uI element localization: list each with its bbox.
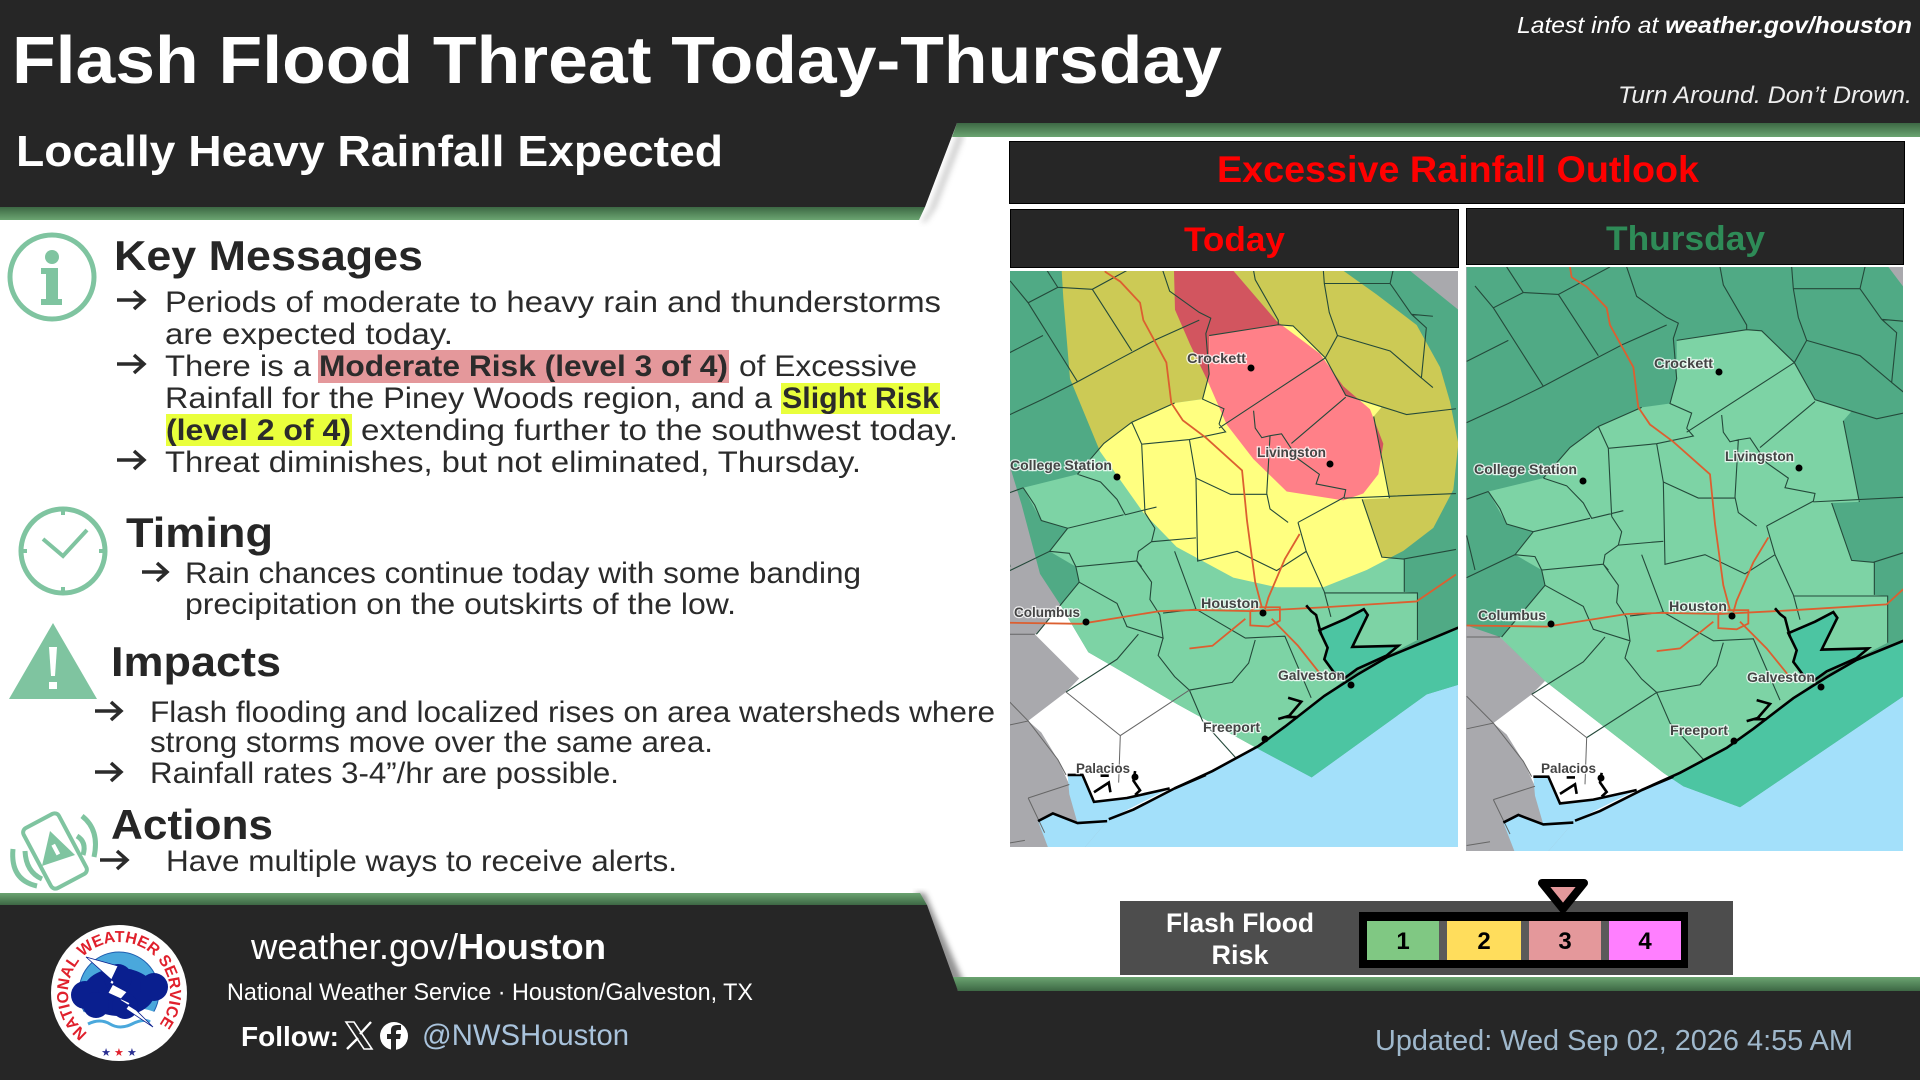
header and side panel shadows	[915, 130, 965, 985]
icon: info	[10, 235, 94, 319]
risk area over gulf	[1257, 629, 1458, 778]
city markers and labels: College Station	[1474, 462, 1577, 477]
today banner	[1010, 210, 1458, 268]
icon: warning triangle	[9, 623, 97, 699]
logo: national weather service: ★ ★ ★	[101, 1047, 137, 1059]
updated timestamp: Updated: Wed Sep 02, 2026 4:55 AM	[1375, 1025, 1853, 1057]
text: alerts: Have multiple ways to receive alerts.	[166, 845, 677, 878]
icon: x	[346, 1022, 372, 1049]
footer website: weather.gov/Houston	[250, 926, 606, 967]
text: risk levels: Slight Risk	[782, 382, 939, 415]
text: risk levels: Moderate Risk (level 3 of 4)	[319, 350, 728, 383]
text: risk levels	[165, 350, 958, 447]
text: periods of rain: Periods of moderate to heavy rain and thunderstorms	[165, 286, 941, 319]
map base: land and water	[1028, 606, 1458, 847]
social handle: @NWSHouston	[422, 1019, 629, 1052]
panel: key messages	[10, 232, 958, 479]
header green band	[952, 123, 1920, 137]
legend scale: 2	[1477, 928, 1491, 955]
footer office name: National Weather Service · Houston/Galveston, TX	[227, 979, 753, 1006]
latest info link: Latest info at weather.gov/houston	[1517, 12, 1912, 38]
map base: land and water	[1467, 267, 1920, 857]
text: risk levels: extending further to the southwest today.	[361, 414, 958, 447]
heading: key messages: Key Messages	[114, 232, 423, 279]
legend: flash flood risk	[1120, 883, 1733, 975]
panel: impacts	[9, 623, 995, 790]
legend scale: 3	[1558, 928, 1572, 955]
side panel green band	[0, 207, 925, 220]
risk areas outside forecast office	[1010, 271, 1458, 777]
arrow	[95, 702, 121, 720]
heading: actions: Actions	[111, 801, 273, 848]
arrow	[142, 563, 167, 581]
arrow	[117, 355, 144, 373]
city markers and labels: Crockett	[1654, 356, 1714, 371]
city markers and labels: Livingston	[1725, 449, 1794, 464]
legend: flash flood risk: Risk	[1211, 940, 1269, 970]
city markers and labels: Livingston	[1257, 445, 1326, 460]
city markers and labels: Houston	[1669, 599, 1727, 614]
text: threat diminishes: Threat diminishes, but not eliminated, Thursday.	[165, 446, 861, 479]
text: periods of rain	[165, 286, 941, 351]
legend scale	[1359, 912, 1688, 968]
icon: clock	[21, 509, 105, 593]
county lines, roads and coast	[1467, 267, 1920, 846]
footer dark panel	[0, 905, 1920, 1080]
legend scale: 1	[1396, 928, 1410, 955]
footer green band right	[952, 977, 1920, 991]
city markers and labels: Palacios	[1541, 761, 1596, 776]
text: flash flooding	[150, 696, 995, 759]
city markers and labels: Crockett	[1187, 351, 1247, 366]
arrow	[117, 291, 144, 309]
arrow	[95, 763, 121, 781]
subtitle: Locally Heavy Rainfall Expected	[16, 127, 723, 176]
city markers and labels: Houston	[1201, 596, 1259, 611]
map: thursday	[1466, 267, 1920, 857]
city markers and labels: Freeport	[1670, 723, 1729, 738]
icon: facebook	[380, 1022, 408, 1050]
text: flash flooding: strong storms move over the same area.	[150, 726, 713, 759]
risk marker	[1542, 883, 1584, 909]
city markers and labels: College Station	[1010, 458, 1112, 473]
panel: timing	[21, 509, 861, 621]
city markers and labels: Columbus	[1478, 608, 1546, 623]
thursday banner: Thursday	[1606, 220, 1765, 258]
legend label: Flash Flood	[1166, 908, 1314, 938]
text: risk levels: (level 2 of 4)	[166, 414, 351, 447]
text: rainfall rates: Rainfall rates 3-4”/hr are possible.	[150, 757, 619, 790]
text: rain chances	[185, 557, 861, 621]
logo: national weather service: NATIONAL WEATHER SERVICE	[57, 931, 182, 1041]
county lines, roads and coast	[1002, 262, 1489, 844]
text: flash flooding: Flash flooding and localized rises on area watersheds where	[150, 696, 995, 729]
city markers and labels: Palacios	[1076, 761, 1130, 776]
arrow	[100, 851, 127, 869]
today banner: Today	[1184, 221, 1285, 259]
panel: actions	[13, 801, 677, 890]
city markers and labels	[1474, 356, 1824, 782]
text: rain chances: Rain chances continue today with some banding	[185, 557, 861, 590]
text: periods of rain: are expected today.	[165, 318, 453, 351]
tagline: Turn Around. Don’t Drown.	[1618, 82, 1912, 109]
risk area inside forecast office	[1489, 330, 1888, 776]
thursday banner	[1466, 208, 1904, 264]
text: risk levels: of Excessive	[739, 350, 917, 383]
follow label: Follow:	[241, 1021, 339, 1052]
title: Flash Flood Threat Today-Thursday	[12, 23, 1222, 98]
city markers and labels: Columbus	[1014, 605, 1080, 620]
text: risk levels: There is a	[165, 350, 311, 383]
text: rain chances: precipitation on the outskirts of the low.	[185, 588, 736, 621]
icon: phone alert	[13, 812, 96, 890]
footer green band left	[0, 893, 927, 905]
city markers and labels: Galveston	[1747, 670, 1815, 685]
outlook banner	[1010, 142, 1904, 204]
city markers and labels: Galveston	[1278, 668, 1345, 683]
header dark panel	[0, 0, 1920, 207]
risk area over gulf	[1672, 642, 1903, 808]
text: risk levels: Rainfall for the Piney Woods region, and a	[165, 382, 772, 415]
legend scale: 4	[1638, 928, 1652, 955]
heading: timing: Timing	[126, 509, 273, 556]
arrow	[117, 451, 144, 469]
risk areas inside forecast office	[1024, 325, 1417, 747]
city markers and labels: Freeport	[1203, 720, 1261, 735]
heading: impacts: Impacts	[111, 638, 281, 685]
outlook banner: Excessive Rainfall Outlook	[1217, 149, 1699, 190]
map: today	[1010, 271, 1458, 847]
city markers and labels	[1010, 351, 1354, 780]
